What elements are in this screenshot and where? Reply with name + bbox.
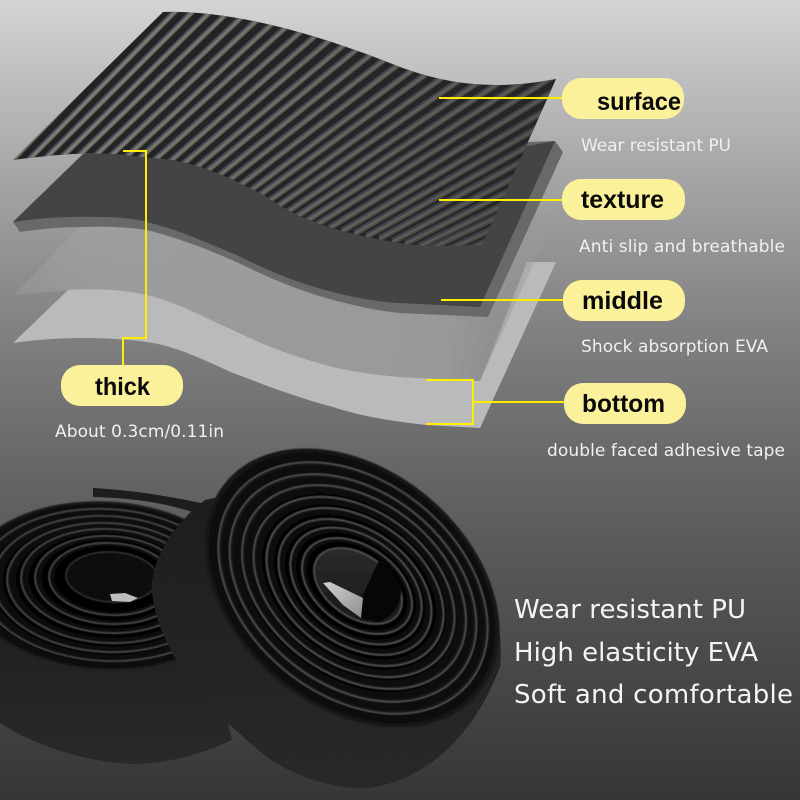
connector: bottom bracket (426, 380, 564, 424)
layer: texture bevel edge (13, 141, 563, 317)
layer: bottom adhesive tape (13, 262, 556, 428)
layer: surface PU with diagonal ribs (13, 12, 556, 246)
left tape roll (0, 488, 249, 764)
left roll rib texture (0, 600, 232, 764)
label: surface (562, 78, 684, 119)
label: texture: texture (581, 186, 664, 214)
left roll tail (93, 488, 205, 514)
feature: comfort: Soft and comfortable (514, 680, 793, 710)
connector: surface (439, 97, 563, 99)
right roll core paper (323, 582, 363, 618)
caption: surface: Wear resistant PU (581, 136, 731, 156)
layer: middle EVA (14, 214, 556, 381)
connector: middle (441, 299, 563, 301)
connector: thick (123, 151, 146, 365)
label: thick: thick (95, 373, 150, 401)
label: surface: surface (597, 88, 681, 116)
label: middle: middle (582, 287, 663, 315)
label: middle (563, 280, 685, 321)
caption: bottom: double faced adhesive tape (547, 441, 785, 461)
feature list (514, 595, 793, 710)
left roll core paper (110, 593, 138, 602)
right tape roll (151, 392, 553, 788)
connector: texture (439, 199, 563, 201)
layer: texture (13, 141, 555, 307)
left roll side wall (0, 600, 232, 764)
caption: texture: Anti slip and breathable (579, 237, 785, 257)
caption: middle: Shock absorption EVA (581, 337, 768, 357)
feature: wear resistant: Wear resistant PU (514, 595, 746, 625)
label: bottom: bottom (582, 390, 665, 418)
right roll rib texture (152, 480, 501, 788)
right roll side wall (152, 480, 501, 788)
right roll core wedge (361, 558, 401, 622)
label: thick (61, 365, 183, 406)
caption: thick: About 0.3cm/0.11in (55, 422, 224, 442)
feature: elasticity: High elasticity EVA (514, 638, 758, 668)
label: texture (562, 179, 685, 220)
left roll spiral windings (0, 495, 249, 677)
right roll spiral windings (151, 392, 553, 784)
label: bottom (564, 383, 686, 424)
